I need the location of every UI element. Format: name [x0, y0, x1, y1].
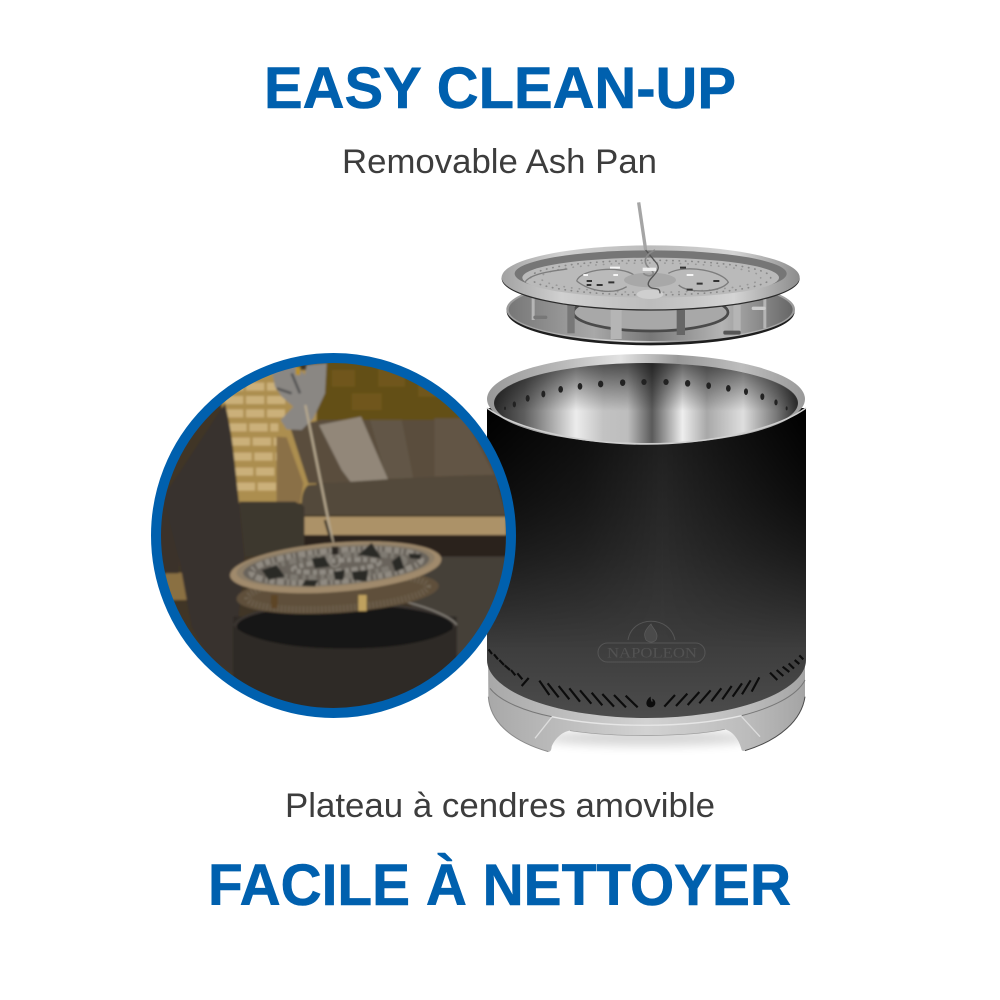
- embossed NAPOLEON logo: NAPOLEON: [607, 646, 697, 662]
- title: EASY CLEAN-UP: [264, 56, 736, 121]
- stainless base: [488, 650, 805, 752]
- poker rod: [305, 405, 334, 550]
- rug: [412, 557, 508, 657]
- photo scene: [161, 363, 506, 708]
- lower disc: [236, 576, 439, 616]
- hedge: [313, 363, 460, 422]
- product: ash pan: [502, 202, 800, 345]
- lower vent slots: [489, 649, 803, 707]
- sofa seat: [302, 475, 507, 515]
- embossed NAPOLEON logo: [598, 621, 705, 662]
- subtitle: Removable Ash Pan: [342, 143, 657, 181]
- black body: [487, 408, 806, 718]
- top rim: [487, 354, 805, 444]
- wicker base: [304, 517, 506, 535]
- ottoman: [238, 500, 304, 514]
- pan legs: [532, 297, 766, 339]
- lifting rod and hook: [639, 202, 660, 293]
- tray: [228, 540, 443, 594]
- sofa back: [290, 420, 505, 483]
- French subtitle: Plateau à cendres amovible: [285, 787, 715, 825]
- brick wall: [222, 370, 317, 503]
- ash: [250, 544, 422, 588]
- glove: [272, 363, 327, 430]
- upper tray: [502, 245, 800, 311]
- drop shadow: [543, 730, 753, 746]
- stainless interior: [487, 363, 806, 444]
- lower disc: [506, 276, 795, 345]
- French title: FACILE À NETTOYER: [208, 853, 791, 918]
- person leg: [181, 403, 240, 600]
- wicker arm: [277, 437, 303, 503]
- product: fire pit: [487, 354, 806, 752]
- flame cut-outs: [504, 379, 788, 410]
- pillow: [319, 417, 388, 486]
- blue ring: [156, 358, 511, 713]
- firepit body: [234, 616, 457, 622]
- circular lifestyle photo: [145, 350, 525, 720]
